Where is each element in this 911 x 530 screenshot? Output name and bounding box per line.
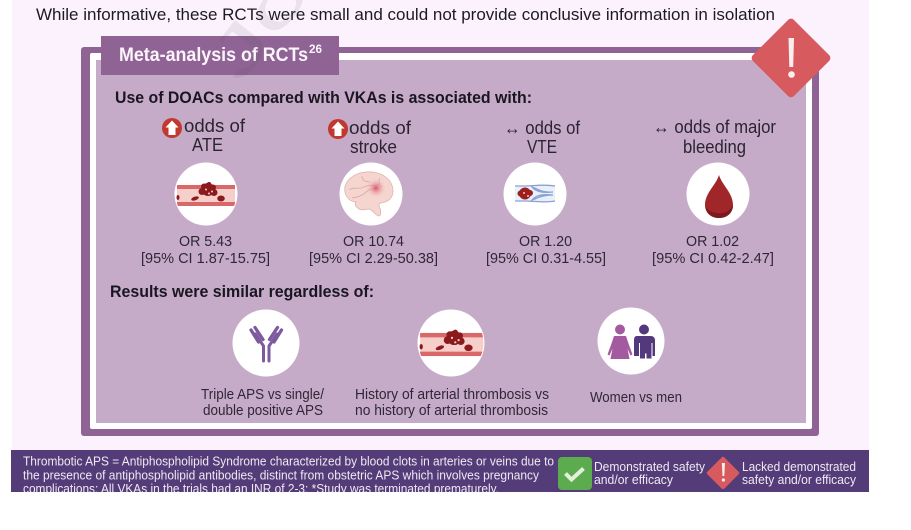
- outcome label: ↔ odds of: [504, 118, 581, 138]
- outcome: major bleeding: [652, 117, 776, 267]
- odds ratio: [95% CI 2.29-50.38]: [309, 250, 438, 267]
- footer bar: [11, 450, 869, 496]
- outcome label: VTE: [527, 137, 557, 157]
- panel heading tab: 26: [309, 44, 322, 56]
- odds ratio: [95% CI 0.31-4.55]: [486, 250, 606, 267]
- intro sentence: While informative, these RCTs were small and could not provide conclusive information in isolation: [36, 5, 775, 24]
- footnote: the presence of antiphospholipid antibodies, distinct from obstetric APS which involves pregnancy: [23, 468, 540, 482]
- icon: arterial clot: [174, 162, 238, 226]
- outcome label: ↔ odds of major: [653, 117, 776, 137]
- legend: demonstrated: Demonstrated safety: [594, 460, 706, 474]
- odds ratio: [309, 233, 438, 267]
- outcome label: bleeding: [683, 137, 746, 157]
- legend: lacked: Lacked demonstrated: [742, 460, 856, 474]
- footnote: complications; All VKAs in the trials had an INR of 2-3; *Study was terminated prematurely.: [23, 482, 499, 496]
- outcome: VTE: [486, 118, 606, 267]
- subheading: association: Use of DOACs compared with VKAs is associated with:: [115, 88, 532, 107]
- caption: Triple APS vs single/: [201, 387, 325, 403]
- caption: Women vs men: [590, 390, 682, 406]
- subgroup: arterial thrombosis history: [355, 310, 549, 419]
- icon: antibody: [232, 310, 300, 376]
- caption: no history of arterial thrombosis: [355, 403, 548, 419]
- subgroup: triple APS: [201, 310, 325, 419]
- panel heading tab: Meta-analysis of RCTs: [119, 45, 308, 66]
- subheading: subgroups: Results were similar regardless of:: [110, 282, 374, 301]
- odds ratio: OR 5.43: [179, 233, 232, 250]
- odds ratio: [652, 233, 774, 267]
- outcome: ATE: [141, 116, 270, 267]
- odds ratio: OR 1.02: [686, 233, 739, 250]
- odds ratio: OR 10.74: [343, 233, 404, 250]
- legend: demonstrated: and/or efficacy: [594, 473, 674, 487]
- footnote: Thrombotic APS = Antiphospholipid Syndrome characterized by blood clots in arteries or veins due to: [23, 454, 554, 468]
- panel: meta-analysis: [81, 17, 832, 436]
- outcome label: odds of: [349, 118, 412, 138]
- outcome label: odds of: [184, 116, 246, 136]
- icon: blood drop: [686, 162, 750, 226]
- odds ratio: [141, 233, 270, 267]
- caption: History of arterial thrombosis vs: [355, 387, 549, 403]
- outcome label: [504, 118, 581, 157]
- icon: arterial clot: [418, 310, 484, 376]
- caption: [201, 387, 325, 419]
- legend: lacked: safety and/or efficacy: [742, 473, 857, 487]
- odds ratio: [95% CI 1.87-15.75]: [141, 250, 270, 267]
- odds ratio: OR 1.20: [519, 233, 572, 250]
- outcome label: stroke: [350, 137, 397, 157]
- outcome label: [349, 118, 412, 157]
- subgroup: sex: [590, 308, 682, 406]
- legend: lacked: [706, 456, 857, 490]
- caption: [355, 387, 549, 419]
- icon: warning diamond: [750, 17, 832, 99]
- caption: double positive APS: [203, 403, 323, 419]
- odds ratio: [95% CI 0.42-2.47]: [652, 250, 774, 267]
- footnote: [23, 456, 554, 492]
- outcome label: ATE: [192, 135, 223, 155]
- outcome: stroke: [309, 118, 438, 267]
- outcome label: [184, 116, 246, 155]
- icon: venous clot: [504, 162, 566, 226]
- icon: up arrow: [162, 118, 182, 138]
- icon: brain: [340, 162, 402, 226]
- panel heading tab: [101, 36, 339, 75]
- legend: demonstrated: [558, 457, 706, 490]
- outcome label: [653, 117, 776, 157]
- icon: woman and man: [598, 308, 664, 374]
- odds ratio: [486, 233, 606, 267]
- icon: up arrow: [328, 119, 348, 139]
